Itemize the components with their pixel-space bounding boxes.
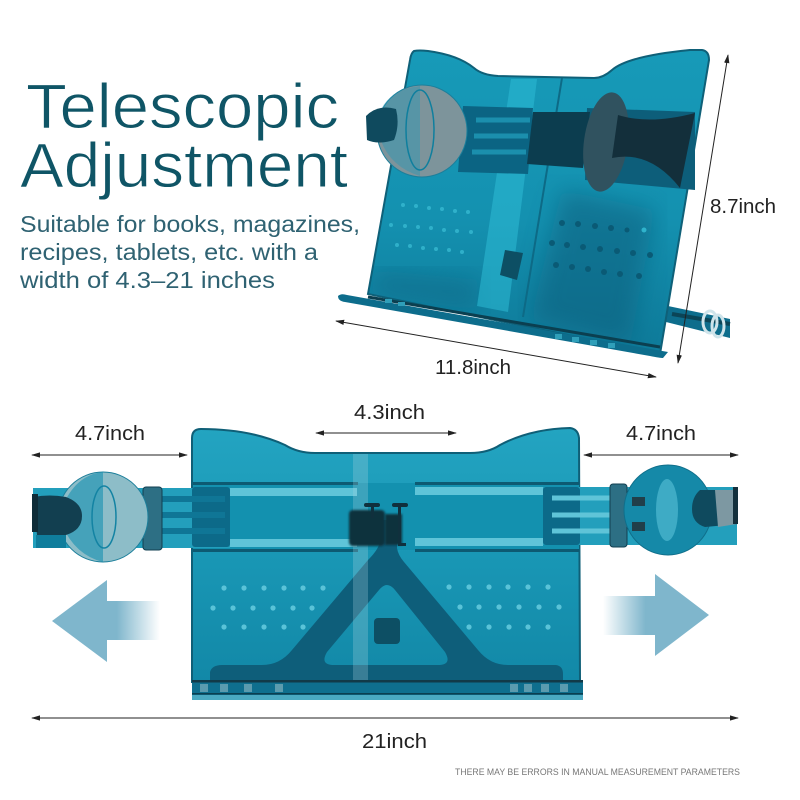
rear support leg [666, 306, 730, 338]
description text: Suitable for books, magazines, [20, 211, 360, 237]
description text [19, 211, 360, 293]
footnote: THERE MAY BE ERRORS IN MANUAL MEASUREMENT PARAMETERS [455, 767, 740, 777]
bottom product: stand, extended [32, 428, 738, 700]
left dots [389, 203, 473, 254]
dimension: 4.3inch: 4.3inch [354, 402, 425, 424]
stand panel [368, 50, 709, 354]
dimension: 11.8inch [336, 321, 656, 379]
stand panel [192, 428, 580, 682]
dimension: 8.7inch [678, 55, 776, 363]
title: Adjustment [20, 131, 349, 201]
left direction arrow [52, 580, 160, 662]
description text: width of 4.3–21 inches [19, 267, 275, 293]
description text: recipes, tablets, etc. with a [20, 239, 319, 265]
base ledge [338, 294, 668, 358]
left knob [366, 85, 467, 177]
dimension: 11.8inch: 11.8inch [435, 357, 511, 379]
left extension arm [32, 472, 230, 562]
right dots [549, 220, 653, 279]
dimension: 4.3inch [316, 402, 456, 433]
centre fold line [523, 78, 562, 317]
top product: book stand, angled view [338, 50, 730, 358]
centre square [374, 618, 400, 644]
prop stand hinge [349, 503, 408, 546]
centre square [500, 250, 523, 280]
centre light strip [353, 454, 368, 680]
dimension: 8.7inch: 8.7inch [710, 196, 776, 218]
title [20, 72, 349, 201]
right clip [577, 89, 695, 195]
dimension: left 4.7inch: 4.7inch [75, 423, 145, 445]
slot channel [193, 482, 579, 552]
central light strip [477, 79, 537, 312]
left dots [210, 585, 326, 630]
dimension: 21inch: 21inch [362, 731, 427, 753]
right dots [446, 584, 562, 630]
triangular prop stand [210, 520, 563, 682]
right extension arm [543, 465, 738, 555]
telescopic arm band [458, 106, 695, 190]
right direction arrow [603, 574, 709, 656]
title: Telescopic [26, 72, 339, 142]
base ledge [192, 680, 583, 700]
dimension: right 4.7inch: 4.7inch [626, 423, 696, 445]
panel shading [370, 190, 655, 345]
